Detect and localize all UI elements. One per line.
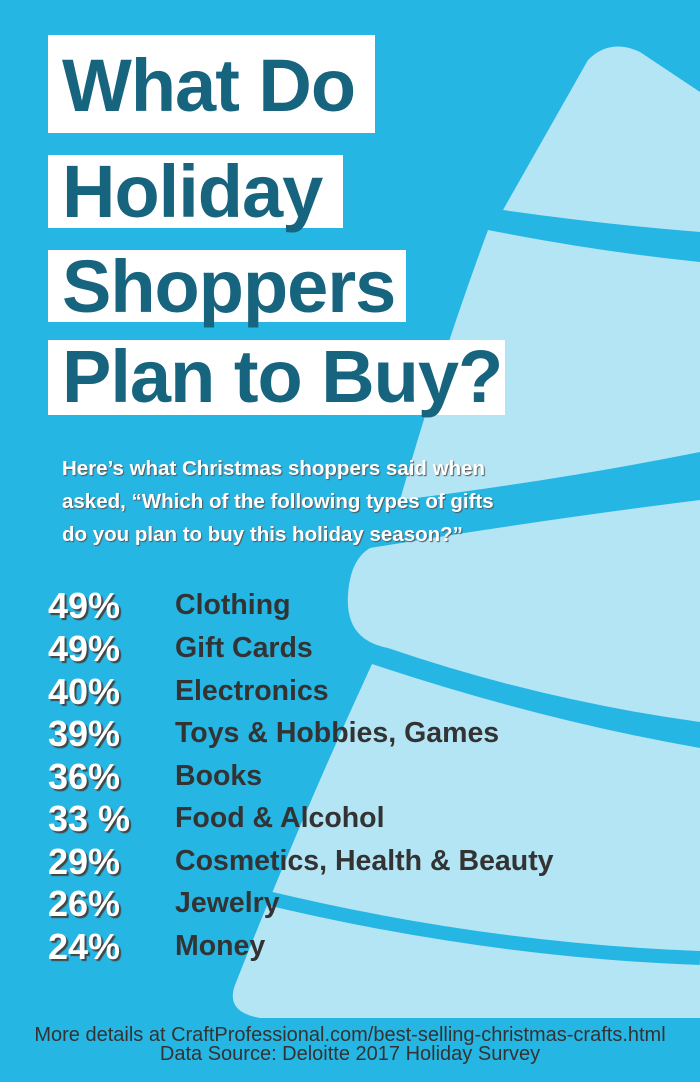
footer: More details at CraftProfessional.com/best-selling-christmas-crafts.html: [34, 1024, 666, 1046]
list: Jewelry: [175, 887, 280, 919]
footer: Data Source: Deloitte 2017 Holiday Survey: [160, 1043, 540, 1065]
list: Gift Cards: [175, 632, 313, 664]
list: Toys & Hobbies, Games: [175, 717, 499, 749]
list: Food & Alcohol: [175, 802, 384, 834]
list: 40%: [48, 671, 120, 712]
list: 33 %: [48, 798, 130, 839]
list: Books: [175, 760, 262, 792]
list: 39%: [48, 713, 120, 754]
list: 36%: [48, 756, 120, 797]
text: Shoppers: [62, 245, 395, 328]
subtitle: Here’s what Christmas shoppers said when: [62, 457, 485, 480]
list: [48, 585, 554, 967]
subtitle: [62, 457, 494, 546]
list: 49%: [48, 585, 120, 626]
text: What Do: [62, 44, 355, 127]
list: Clothing: [175, 589, 291, 621]
list: 29%: [48, 841, 120, 882]
subtitle: asked, “Which of the following types of gifts: [62, 490, 494, 513]
list: 26%: [48, 883, 120, 924]
list: 24%: [48, 926, 120, 967]
title: [48, 35, 505, 418]
list: Money: [175, 930, 265, 962]
list: Cosmetics, Health & Beauty: [175, 845, 554, 877]
list: 49%: [48, 628, 120, 669]
list: Electronics: [175, 675, 329, 707]
footer: [34, 1024, 666, 1065]
text: Plan to Buy?: [62, 335, 502, 418]
text: Holiday: [62, 150, 322, 233]
subtitle: do you plan to buy this holiday season?”: [62, 523, 463, 546]
